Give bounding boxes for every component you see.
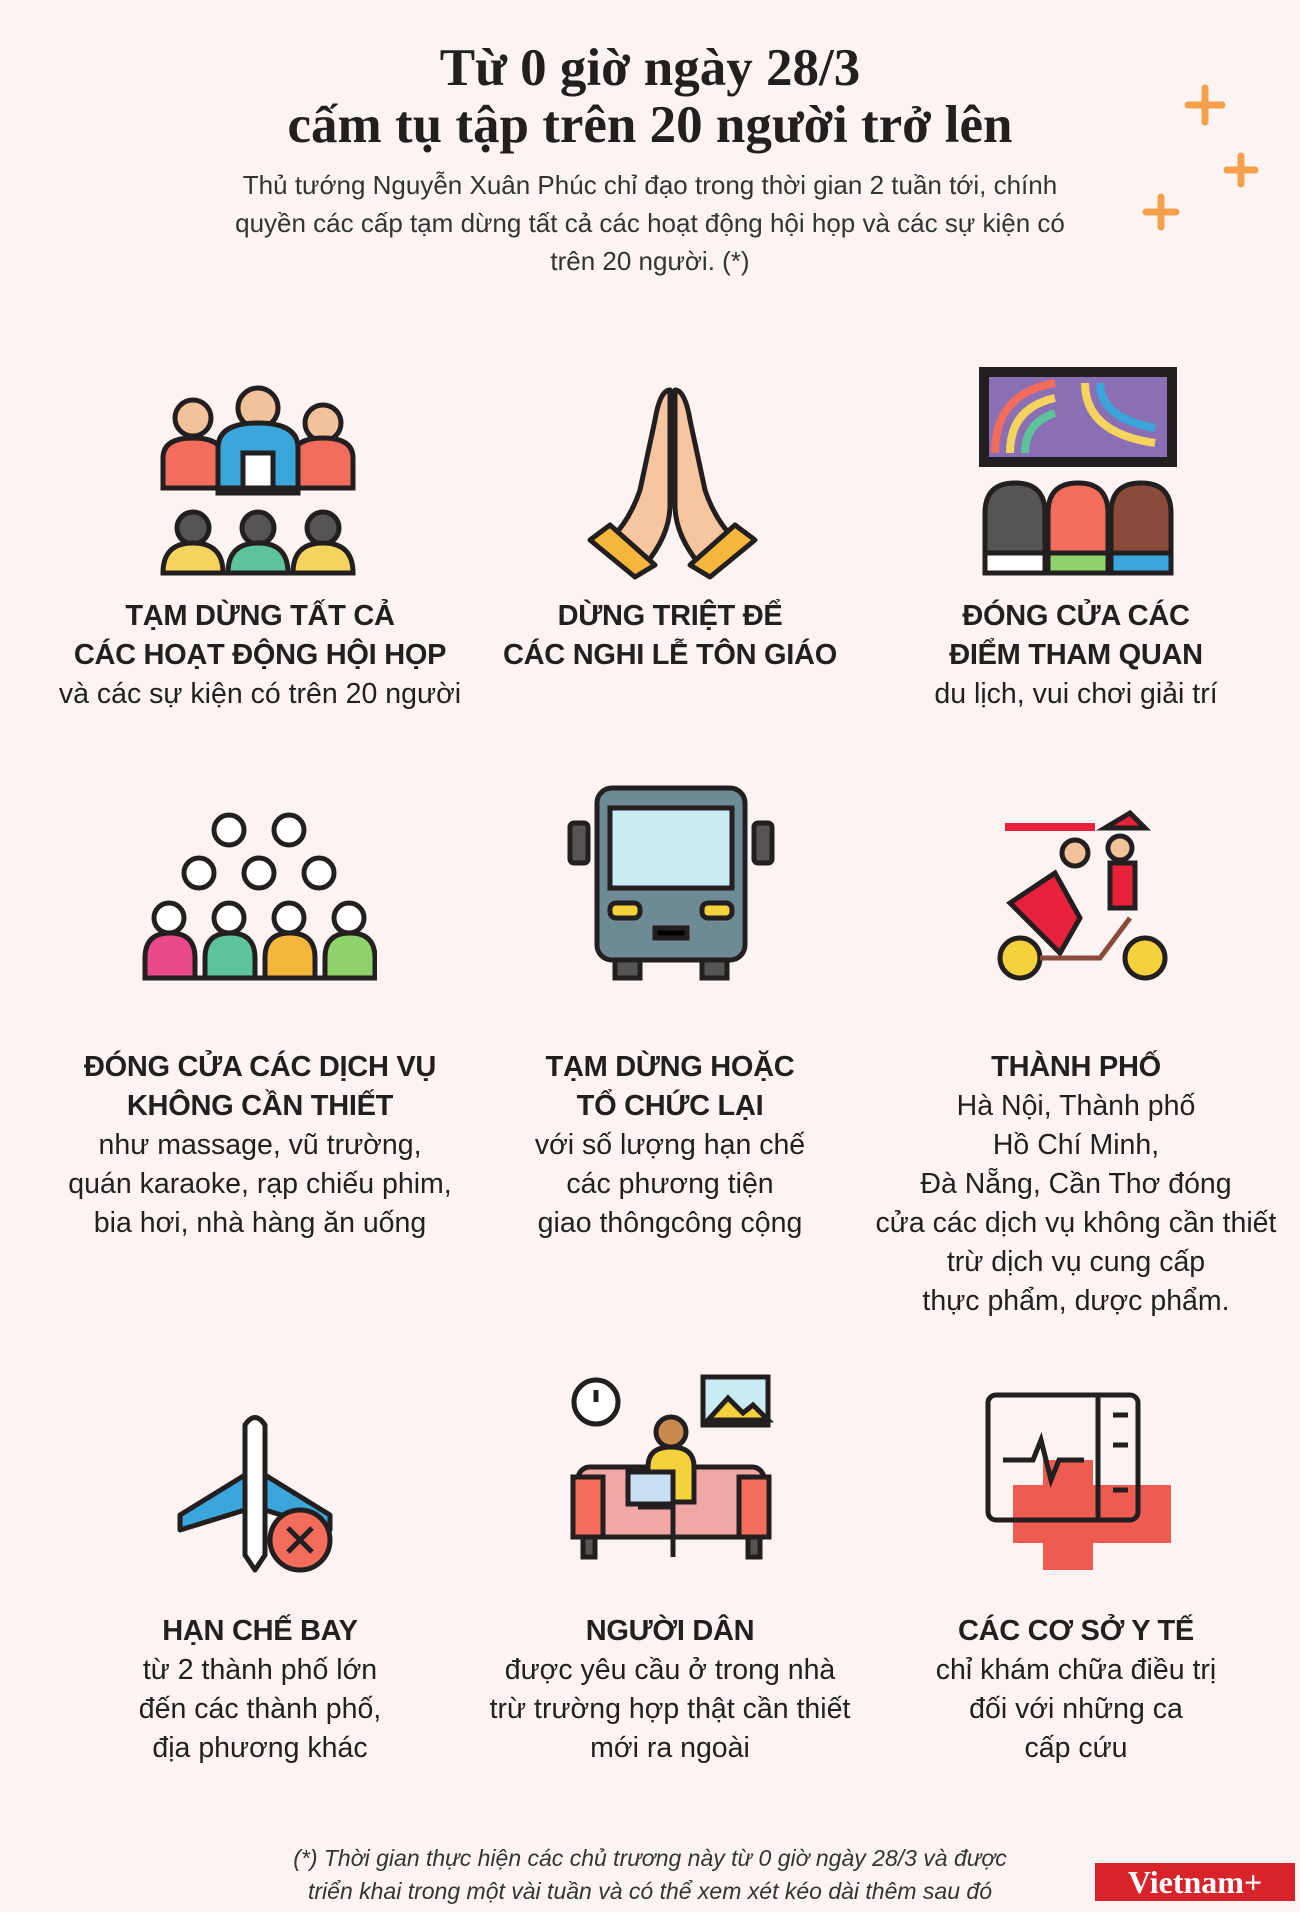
icon: praying hands [588, 388, 758, 580]
text: religion [503, 599, 837, 671]
text: meetings: và các sự kiện có trên 20 người [59, 678, 461, 710]
text: cities: Hà Nội, Thành phố [957, 1090, 1195, 1122]
subtitle [235, 170, 1065, 276]
title: Từ 0 giờ ngày 28/3 [440, 39, 860, 97]
text: health: chỉ khám chữa điều trị [936, 1654, 1216, 1686]
text: transport: TẠM DỪNG HOẶC [546, 1051, 794, 1083]
footnote [293, 1845, 1007, 1904]
subtitle: Thủ tướng Nguyễn Xuân Phúc chỉ đạo trong thời gian 2 tuần tới, chính [243, 170, 1057, 200]
text: stay home: NGƯỜI DÂN [586, 1615, 754, 1647]
text: flights: đến các thành phố, [139, 1693, 381, 1725]
logo: Vietnam+ [1128, 1864, 1262, 1900]
text: cities [876, 1050, 1276, 1317]
text: stay home: trừ trường hợp thật cần thiết [490, 1693, 850, 1725]
icon: cyclo [998, 810, 1168, 980]
text: meetings [59, 599, 461, 710]
text: services: quán karaoke, rạp chiếu phim, [68, 1168, 452, 1200]
text: tourism: ĐIỂM THAM QUAN [949, 639, 1203, 671]
icon: plane with x [178, 1415, 332, 1572]
text: stay home: mới ra ngoài [590, 1732, 750, 1764]
icon: person on sofa [570, 1374, 774, 1560]
text: services: như massage, vũ trường, [98, 1129, 422, 1161]
text: tourism: du lịch, vui chơi giải trí [934, 678, 1218, 710]
text: cities: thực phẩm, dược phẩm. [922, 1285, 1230, 1317]
text: transport: với số lượng hạn chế [535, 1129, 805, 1161]
decorative plus signs [1142, 84, 1258, 230]
text: services [68, 1050, 452, 1239]
text: transport: giao thôngcông cộng [538, 1207, 802, 1239]
footnote: (*) Thời gian thực hiện các chủ trương này từ 0 giờ ngày 28/3 và được [293, 1845, 1007, 1871]
icon: medical [986, 1392, 1171, 1570]
text: services: ĐÓNG CỬA CÁC DỊCH VỤ [84, 1051, 436, 1083]
icon: meeting people [160, 386, 356, 576]
footnote: triển khai trong một vài tuần và có thể xem xét kéo dài thêm sau đó [308, 1878, 992, 1904]
text: flights: từ 2 thành phố lớn [143, 1654, 377, 1686]
text: flights: HẠN CHẾ BAY [162, 1615, 358, 1647]
text: religion: DỪNG TRIỆT ĐỂ [558, 600, 782, 632]
subtitle: quyền các cấp tạm dừng tất cả các hoạt động hội họp và các sự kiện có [235, 208, 1065, 238]
logo [1095, 1863, 1295, 1901]
text: cities: Hồ Chí Minh, [993, 1129, 1159, 1161]
text: health [936, 1614, 1216, 1764]
title [288, 39, 1012, 154]
icon: bus [568, 786, 774, 980]
text: tourism: ĐÓNG CỬA CÁC [962, 600, 1190, 632]
text: transport [535, 1050, 805, 1239]
text: stay home [490, 1614, 850, 1764]
text: cities: cửa các dịch vụ không cần thiết [876, 1207, 1276, 1239]
text: cities: trừ dịch vụ cung cấp [947, 1246, 1205, 1278]
title: cấm tụ tập trên 20 người trở lên [288, 96, 1012, 154]
text: transport: các phương tiện [566, 1168, 774, 1200]
text: flights [139, 1614, 381, 1764]
text: health: CÁC CƠ SỞ Y TẾ [958, 1615, 1194, 1647]
text: cities: Đà Nẵng, Cần Thơ đóng [920, 1168, 1232, 1200]
text: flights: địa phương khác [152, 1732, 368, 1764]
text: transport: TỔ CHỨC LẠI [577, 1090, 763, 1122]
text: religion: CÁC NGHI LỄ TÔN GIÁO [503, 639, 837, 671]
text: health: cấp cứu [1024, 1732, 1128, 1764]
icon: gallery [979, 367, 1177, 576]
text: tourism [934, 599, 1218, 710]
subtitle: trên 20 người. (*) [550, 246, 750, 276]
text: services: KHÔNG CẦN THIẾT [127, 1090, 393, 1122]
text: services: bia hơi, nhà hàng ăn uống [94, 1207, 426, 1239]
text: health: đối với những ca [969, 1693, 1183, 1725]
text: meetings: CÁC HOẠT ĐỘNG HỘI HỌP [74, 639, 446, 671]
icon: crowd [142, 812, 377, 980]
text: stay home: được yêu cầu ở trong nhà [505, 1654, 835, 1686]
text: cities: THÀNH PHỐ [991, 1051, 1161, 1083]
text: meetings: TẠM DỪNG TẤT CẢ [125, 600, 395, 632]
